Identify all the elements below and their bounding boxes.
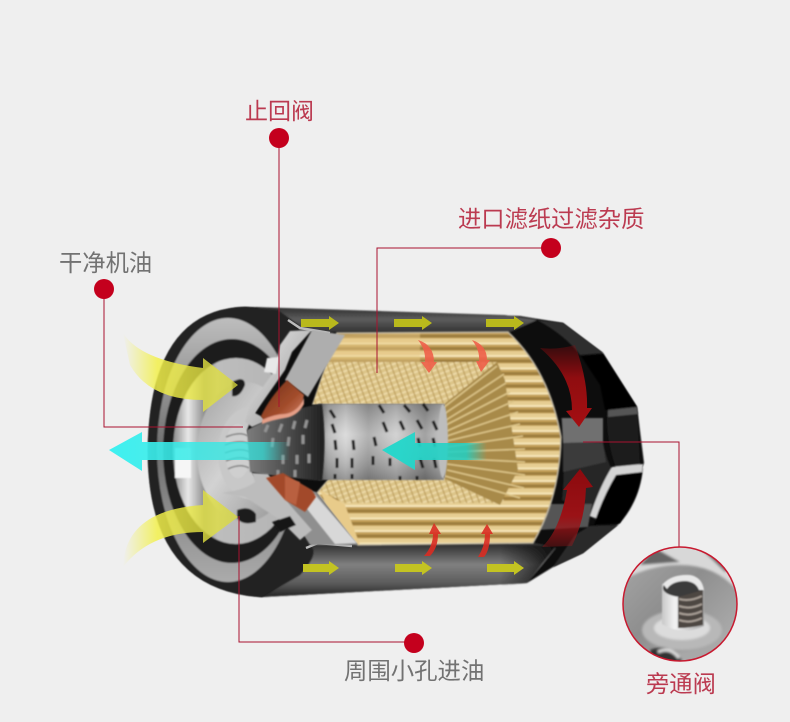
dark inner cone — [247, 404, 324, 481]
yellow inflow arrow: bottom — [123, 490, 238, 567]
red bypass arrow: top — [540, 345, 592, 427]
label: bypass valve: 旁通阀 — [646, 671, 716, 697]
circulating oil arrows: olive top — [301, 316, 524, 330]
radial pleats — [443, 366, 525, 498]
red arrows through paper: top — [418, 340, 490, 373]
circulating oil arrows: olive bottom — [303, 561, 524, 575]
valve cylinder — [662, 575, 704, 631]
leader line: clean oil — [104, 289, 243, 427]
threaded outlet — [225, 424, 251, 478]
bottom bracket — [222, 473, 312, 540]
label: check valve: 止回阀 — [245, 98, 314, 124]
cap seam — [288, 320, 352, 548]
outer casing — [148, 307, 644, 597]
perforated centre tube — [318, 404, 448, 480]
check valve rubber bottom — [266, 473, 316, 512]
leader line: check valve — [278, 138, 280, 407]
oil filter cutaway — [109, 307, 644, 597]
marker: check valve — [269, 128, 289, 148]
hex nut end — [537, 320, 643, 567]
end cap — [148, 307, 314, 597]
cyan outflow arrow: outer — [109, 432, 290, 471]
check valve rubber top — [261, 380, 304, 424]
marker: filter paper — [541, 238, 561, 258]
oil inlet holes — [232, 379, 256, 523]
filter paper — [309, 332, 561, 545]
bypass valve detail circle — [623, 545, 737, 665]
label: surrounding holes oil inlet: 周围小孔进油 — [344, 658, 484, 684]
cyan outflow arrow: inner — [382, 432, 487, 470]
red arrows through paper: bottom — [424, 523, 493, 557]
leader line: surrounding holes — [239, 516, 414, 642]
top bracket — [245, 330, 312, 427]
marker: surrounding holes — [404, 633, 424, 653]
label: clean oil: 干净机油 — [59, 250, 152, 276]
marker: clean oil — [94, 279, 114, 299]
yellow inflow arrow: top — [123, 333, 238, 412]
inner shoulders — [268, 330, 358, 545]
leader line: bypass valve — [583, 442, 679, 548]
leader line: filter paper — [377, 248, 551, 373]
label: filter paper filters impurities: 进口滤纸过滤杂质 — [458, 206, 644, 232]
red bypass arrow: bottom — [542, 469, 593, 547]
